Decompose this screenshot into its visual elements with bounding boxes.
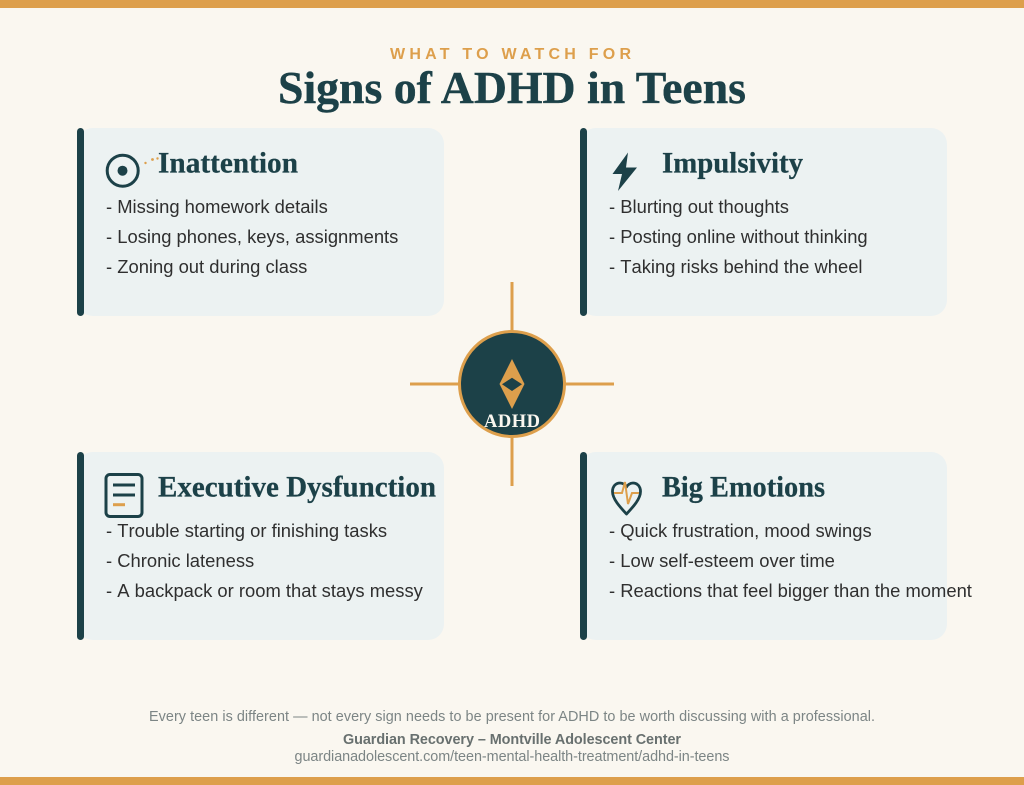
list: inattention signs: - Losing phones, keys, assignments [106, 226, 398, 247]
list: inattention signs: - Missing homework details [106, 196, 328, 217]
list: impulsivity signs: - Blurting out thoughts [609, 196, 789, 217]
list: big emotions signs: - Reactions that feel bigger than the moment [609, 580, 972, 601]
list: inattention signs [106, 196, 398, 277]
footer url: guardianadolescent.com/teen-mental-health-treatment/adhd-in-teens [294, 749, 730, 765]
heading: executive dysfunction: Executive Dysfunction [158, 470, 436, 504]
list: impulsivity signs: - Taking risks behind the wheel [609, 256, 863, 277]
heading: inattention: Inattention [158, 146, 298, 180]
top border bar [0, 0, 1024, 8]
list: executive dysfunction signs: - Chronic lateness [106, 550, 254, 571]
center hub: ADHD [410, 282, 614, 486]
icon: diamond [500, 359, 524, 409]
list: executive dysfunction signs: - Trouble starting or finishing tasks [106, 520, 387, 541]
hub label: ADHD [484, 412, 540, 432]
list: big emotions signs [609, 520, 972, 601]
icon: heart with pulse [612, 482, 640, 514]
panel: big emotions [580, 452, 972, 640]
footer note: Every teen is different — not every sign needs to be present for ADHD to be worth discussing with a professional. [149, 709, 875, 725]
footer organisation: Guardian Recovery – Montville Adolescent Center [343, 732, 681, 748]
list: impulsivity signs: - Posting online without thinking [609, 226, 868, 247]
list: big emotions signs: - Quick frustration, mood swings [609, 520, 872, 541]
list: executive dysfunction signs: - A backpack or room that stays messy [106, 580, 424, 601]
list: big emotions signs: - Low self-esteem over time [609, 550, 835, 571]
list: impulsivity signs [609, 196, 868, 277]
title: Signs of ADHD in Teens [278, 62, 746, 113]
heading: impulsivity: Impulsivity [662, 146, 803, 180]
panel: executive dysfunction [77, 452, 444, 640]
icon: checklist page [106, 474, 142, 516]
list: executive dysfunction signs [106, 520, 424, 601]
panel: impulsivity [580, 128, 947, 316]
icon: lightning bolt [612, 152, 637, 191]
list: inattention signs: - Zoning out during class [106, 256, 307, 277]
panel: inattention [77, 128, 444, 316]
heading: big emotions: Big Emotions [662, 470, 825, 504]
icon: target [107, 155, 165, 186]
bottom border bar [0, 777, 1024, 785]
eyebrow heading: WHAT TO WATCH FOR [390, 46, 631, 63]
